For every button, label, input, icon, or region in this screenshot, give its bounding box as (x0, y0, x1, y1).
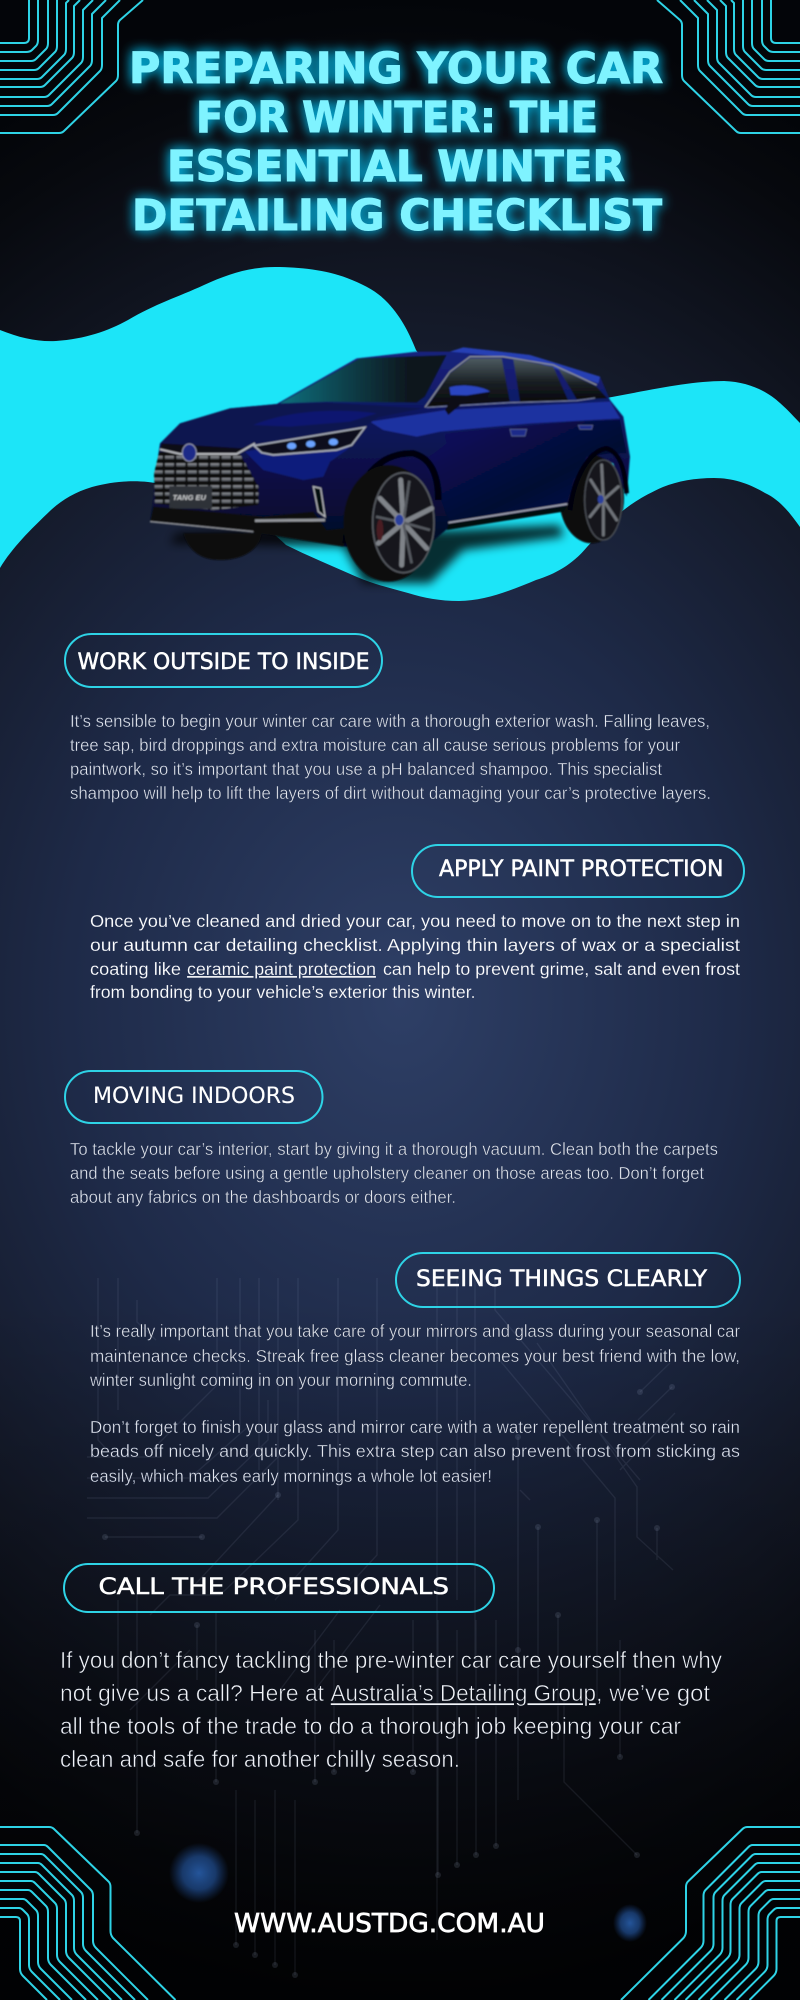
text: paragraph 4: It’s really important that you take care of your mirrors and glass during your seasonal car (90, 1321, 740, 1341)
hood (161, 403, 423, 450)
text: paragraph 5: beads off nicely and quickly. This extra step can also prevent frost from sticking as (90, 1441, 740, 1461)
glow spots (169, 1843, 647, 1942)
text: paragraph 5: Don’t forget to finish your glass and mirror care with a water repellent treatment so rain (90, 1417, 740, 1437)
badge (182, 444, 196, 461)
text: paragraph 2: coating like (90, 959, 181, 979)
title (129, 45, 663, 241)
text: paragraph 1 (70, 711, 711, 803)
text: paragraph 5: easily, which makes early mornings a whole lot easier! (90, 1466, 492, 1486)
text: paragraph 4: maintenance checks. Streak free glass cleaner becomes your best friend with the low, (90, 1346, 740, 1366)
headlight (254, 427, 365, 455)
text: paragraph 2: Once you’ve cleaned and dried your car, you need to move on to the next step in (90, 911, 740, 931)
title: DETAILING CHECKLIST (132, 192, 662, 241)
text: paragraph 4 (89, 1321, 740, 1390)
pill: seeing things clearly: SEEING THINGS CLEARLY (416, 1267, 708, 1292)
grille top band (160, 443, 253, 454)
pill: apply paint protection (412, 845, 744, 897)
text: paragraph 1: tree sap, bird droppings and extra moisture can all cause serious problems for your (70, 735, 680, 755)
front wheel arch (346, 453, 438, 543)
section 1: work outside to inside (65, 634, 711, 803)
circuit board pattern (87, 1278, 675, 1978)
bumper blue (245, 430, 363, 480)
car shadow (170, 525, 563, 583)
text: paragraph 2: can help to prevent grime, salt and even frost (383, 959, 740, 979)
text: paragraph 3: about any fabrics on the dashboards or doors either. (70, 1187, 456, 1207)
lower bumper (150, 507, 350, 547)
side windows (427, 358, 607, 407)
body (150, 347, 630, 547)
section 4: seeing things clearly (89, 1253, 740, 1486)
text: paragraph 2: our autumn car detailing checklist. Applying thin layers of wax or a specialist (90, 935, 740, 955)
pill: work outside to inside (65, 634, 382, 687)
bottom left circuit corner (0, 1827, 176, 2000)
sill chrome (447, 506, 567, 530)
section 3: moving indoors (65, 1071, 718, 1207)
door handles (510, 425, 593, 436)
text: paragraph 6: Australia’s Detailing Group (330, 1680, 596, 1706)
rear tyre (559, 453, 624, 543)
text: paragraph 2: from bonding to your vehicle’s exterior this winter. (90, 982, 476, 1002)
text: paragraph 3: and the seats before using a gentle upholstery cleaner on those areas too. Don’t forget (70, 1163, 704, 1183)
window chrome (425, 357, 597, 407)
text: paragraph 3 (70, 1139, 718, 1207)
text: paragraph 6: clean and safe for another chilly season. (60, 1746, 460, 1772)
title: ESSENTIAL WINTER (167, 143, 625, 192)
section 5: call the professionals (60, 1564, 722, 1772)
pill: call the professionals: CALL THE PROFESSIONALS (98, 1575, 449, 1600)
text: paragraph 6: If you don’t fancy tackling the pre-winter car care yourself then why (60, 1647, 722, 1673)
text: paragraph 2: ceramic paint protection (187, 959, 376, 979)
text: paragraph 5 (90, 1417, 740, 1486)
pill: seeing things clearly (396, 1253, 740, 1307)
pill: work outside to inside: WORK OUTSIDE TO INSIDE (78, 650, 370, 675)
text: paragraph 4: winter sunlight coming in on your morning commute. (89, 1370, 472, 1390)
grille (154, 452, 258, 510)
text: paragraph 3: To tackle your car’s interior, start by giving it a thorough vacuum. Clean both the carpets (70, 1139, 718, 1159)
text: paragraph 1: shampoo will help to lift the layers of dirt without damaging your car’s protective layers. (70, 783, 711, 803)
rear wheel (585, 460, 622, 540)
title: PREPARING YOUR CAR (129, 45, 663, 94)
section 2: apply paint protection (90, 845, 744, 1002)
cyan wave blob (0, 267, 800, 601)
pill: apply paint protection: APPLY PAINT PROTECTION (439, 857, 724, 882)
text: paragraph 6: , we’ve got (596, 1680, 710, 1706)
windshield (280, 355, 447, 403)
pill: moving indoors (65, 1071, 322, 1123)
front wheel (343, 465, 434, 582)
number plate (169, 486, 212, 509)
door panel (423, 420, 627, 522)
roof trim (450, 347, 600, 383)
top right circuit corner (657, 0, 800, 133)
pill: call the professionals (64, 1564, 494, 1612)
shoulder highlight (370, 402, 620, 437)
title: FOR WINTER: THE (196, 94, 598, 143)
text: paragraph 6: not give us a call? Here at (60, 1680, 324, 1706)
mirror (445, 386, 490, 415)
text: paragraph 6 (60, 1647, 722, 1772)
text: paragraph 2 (90, 911, 740, 1002)
text: paragraph 1: It’s sensible to begin your winter car care with a thorough exterior wash. Falling leaves, (70, 711, 710, 731)
pill: moving indoors: MOVING INDOORS (93, 1084, 295, 1109)
car illustration (150, 347, 630, 583)
top left circuit corner (0, 0, 143, 133)
car artwork (150, 347, 630, 582)
bottom right circuit corner (621, 1827, 800, 2000)
website url: WWW.AUSTDG.COM.AU (234, 1909, 545, 1939)
far front tyre (183, 533, 262, 560)
text: paragraph 6: all the tools of the trade to do a thorough job keeping your car (60, 1713, 681, 1739)
number plate: TANG EU (173, 493, 206, 502)
rear wheel arch (570, 448, 627, 510)
text: paragraph 1: paintwork, so it’s important that you use a pH balanced shampoo. This specialist (70, 759, 662, 779)
